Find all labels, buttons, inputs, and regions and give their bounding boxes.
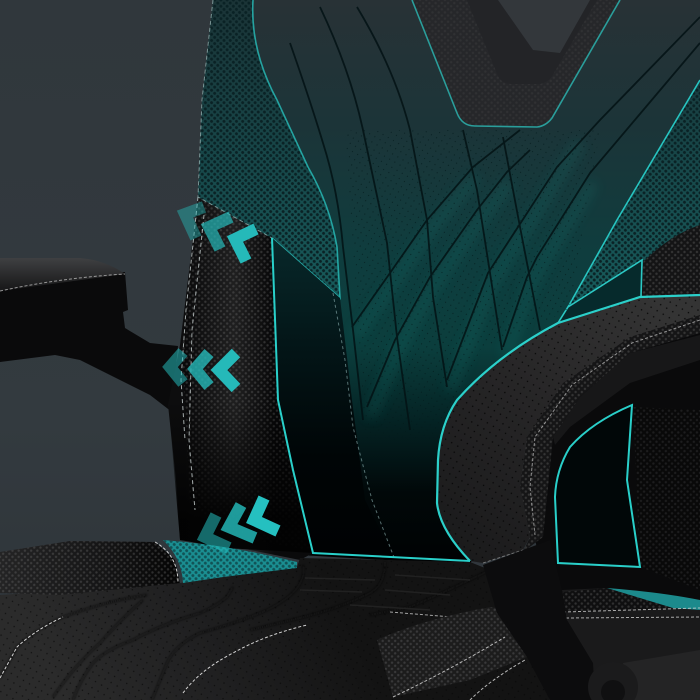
seat quilt folds xyxy=(0,562,490,700)
armrest stem xyxy=(483,540,595,700)
quilted perforation xyxy=(345,130,600,440)
small teal triangle inset xyxy=(558,260,642,323)
right bolster xyxy=(641,225,700,300)
seat xyxy=(0,558,550,700)
teal mesh left wing xyxy=(198,0,340,298)
seat quilt ridges xyxy=(300,575,470,610)
right carbon panel xyxy=(633,407,700,590)
right seat and stem xyxy=(483,540,700,700)
seat carbon patch xyxy=(377,607,527,700)
left side stitching xyxy=(181,197,204,510)
left seat bolster xyxy=(0,541,180,595)
teal mesh right wing xyxy=(568,80,700,307)
arrows: top chevrons xyxy=(185,207,256,261)
lumbar highlight panel xyxy=(272,238,470,561)
caster ring xyxy=(588,662,638,700)
inner arm band xyxy=(553,335,700,445)
right side back behind armrest xyxy=(520,315,700,600)
headrest cutout xyxy=(412,0,620,127)
armrest carbon band xyxy=(520,312,700,552)
armrest pad xyxy=(437,295,700,563)
left bolster pad xyxy=(168,197,313,560)
lower bolster fade xyxy=(168,400,313,553)
arrows: middle chevrons xyxy=(170,352,236,388)
arrows: bottom chevrons xyxy=(205,498,278,548)
left armrest xyxy=(0,258,178,412)
teal seat band xyxy=(163,540,297,583)
quilted stitching lines xyxy=(290,7,700,430)
left bolster texture xyxy=(182,197,310,550)
chair back: centre panel xyxy=(205,0,700,565)
teal inset below armrest xyxy=(555,405,640,567)
quilted lit highlights xyxy=(355,143,593,417)
